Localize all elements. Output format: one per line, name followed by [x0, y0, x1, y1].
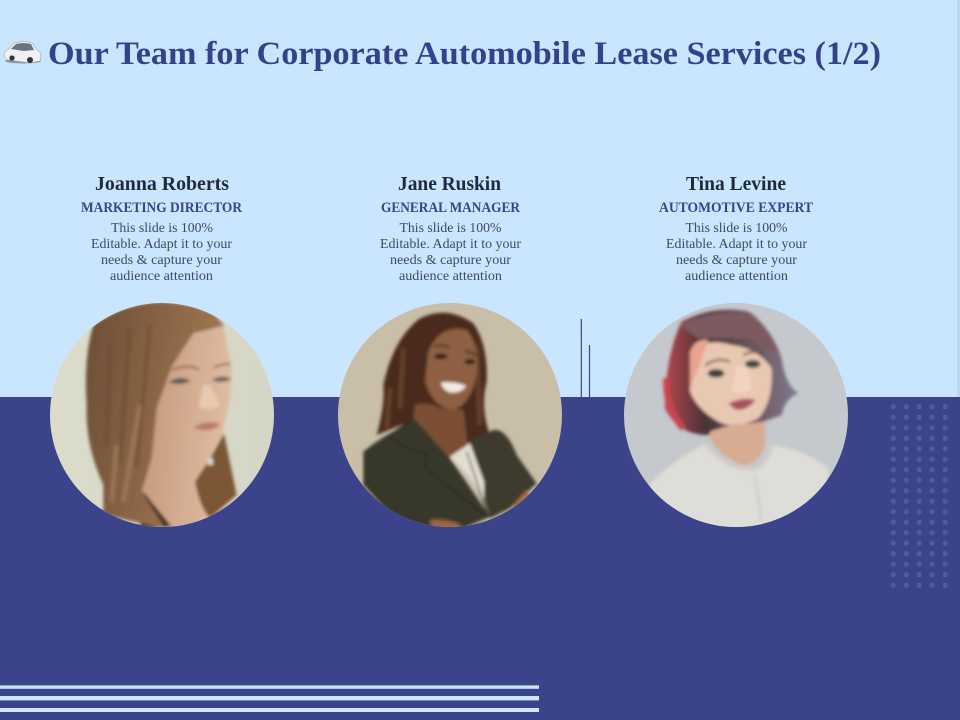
right edge shade	[957, 0, 960, 397]
portrait: Jane Ruskin	[338, 303, 562, 527]
team member: Joanna Roberts text: audience attention	[110, 268, 213, 283]
team member: Jane Ruskin text: needs & capture your	[390, 252, 512, 267]
team member: Joanna Roberts text: This slide is 100%	[111, 220, 213, 235]
team member: Jane Ruskin text: GENERAL MANAGER	[381, 200, 520, 216]
team member: Jane Ruskin text	[380, 173, 522, 283]
portrait: Joanna Roberts	[50, 303, 274, 527]
dot pattern	[887, 401, 952, 590]
background: light upper panel	[0, 0, 960, 397]
team member: Joanna Roberts text: needs & capture your	[101, 252, 223, 267]
team member: Tina Levine text	[659, 173, 813, 283]
team member: Jane Ruskin text: audience attention	[399, 268, 502, 283]
team member: Jane Ruskin text: Jane Ruskin	[398, 173, 501, 195]
team member: Tina Levine text: This slide is 100%	[686, 220, 788, 235]
team member: Jane Ruskin text: This slide is 100%	[400, 220, 502, 235]
team member: Tina Levine text: needs & capture your	[676, 252, 798, 267]
portrait: Tina Levine	[624, 303, 848, 527]
title: Our Team for Corporate Automobile Lease Services (1/2)	[48, 36, 881, 72]
team member: Tina Levine text: audience attention	[685, 268, 788, 283]
team member: Joanna Roberts text: Editable. Adapt it to your	[91, 236, 233, 251]
decorative vertical lines	[581, 319, 590, 397]
background: navy lower panel	[0, 397, 960, 720]
team member: Joanna Roberts text	[81, 173, 242, 283]
team member: Tina Levine text: Tina Levine	[686, 173, 786, 195]
team member: Joanna Roberts text: Joanna Roberts	[95, 173, 229, 195]
team member: Tina Levine text: Editable. Adapt it to your	[666, 236, 808, 251]
icon: white car	[4, 42, 41, 64]
bottom accent stripes	[0, 685, 539, 712]
team member: Joanna Roberts text: MARKETING DIRECTOR	[81, 200, 242, 216]
team member: Jane Ruskin text: Editable. Adapt it to your	[380, 236, 522, 251]
team member: Tina Levine text: AUTOMOTIVE EXPERT	[659, 200, 813, 216]
